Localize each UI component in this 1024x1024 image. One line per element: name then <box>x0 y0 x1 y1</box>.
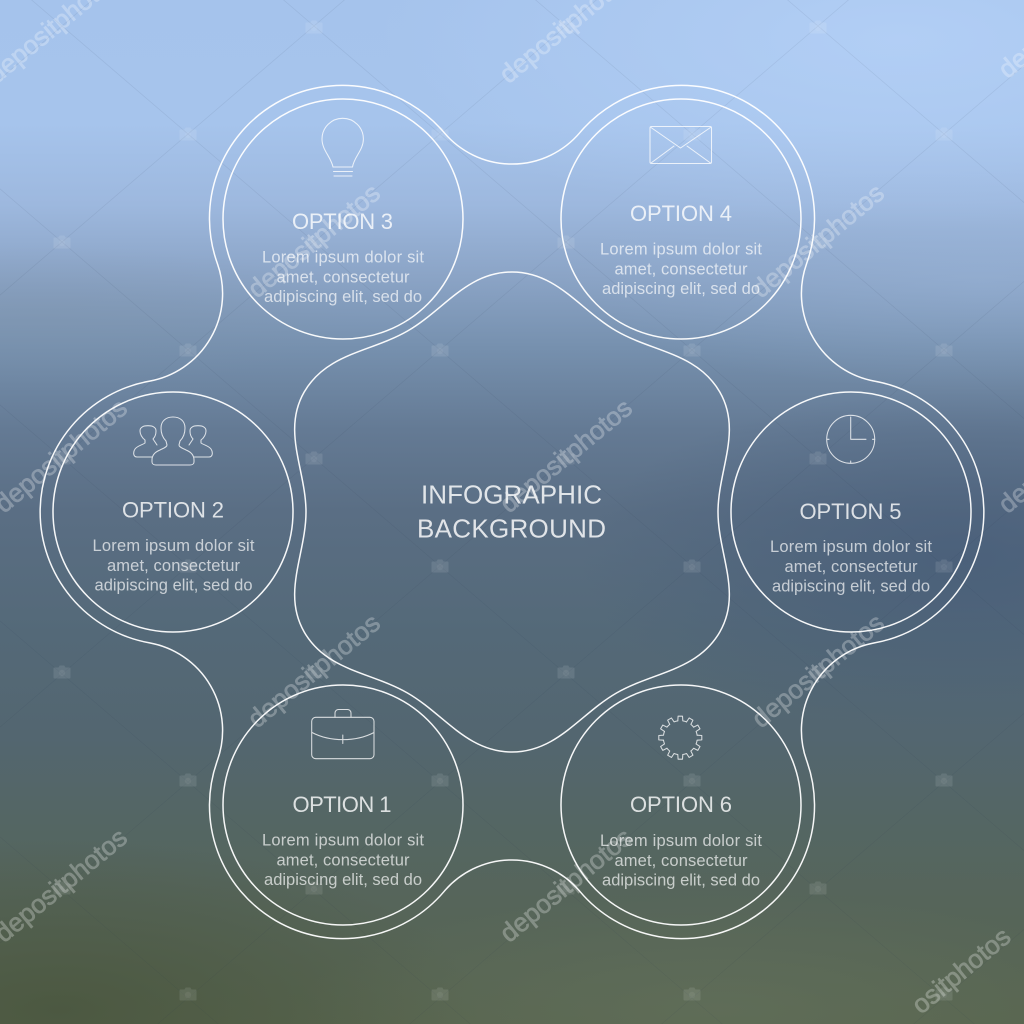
description <box>262 248 424 306</box>
description: amet, consectetur <box>784 558 918 576</box>
description <box>600 832 762 890</box>
description: Lorem ipsum dolor sit <box>262 248 424 266</box>
heading: OPTION 6 <box>630 792 732 817</box>
panel: option 4 <box>561 99 801 339</box>
description: adipiscing elit, sed do <box>264 288 422 306</box>
description: amet, consectetur <box>276 852 410 870</box>
description: Lorem ipsum dolor sit <box>92 537 255 555</box>
description: Lorem ipsum dolor sit <box>600 240 762 258</box>
heading: OPTION 4 <box>630 201 732 226</box>
description: amet, consectetur <box>107 557 240 575</box>
description: adipiscing elit, sed do <box>264 871 422 889</box>
watermark text: depositphotos <box>494 392 638 519</box>
icon: people <box>134 417 212 465</box>
description: Lorem ipsum dolor sit <box>600 832 762 850</box>
center title <box>417 480 606 544</box>
icon: briefcase <box>312 710 374 759</box>
icon: envelope <box>650 126 712 164</box>
description <box>600 240 762 298</box>
heading: OPTION 3 <box>292 209 393 234</box>
center title: BACKGROUND <box>417 514 606 544</box>
watermark text: depositphotos <box>494 822 638 948</box>
description <box>92 537 255 594</box>
heading: OPTION 5 <box>800 499 902 524</box>
panel: option 3 <box>223 99 463 339</box>
panel: option 1 <box>223 685 463 925</box>
outer ring outline <box>40 85 984 939</box>
center title: INFOGRAPHIC <box>421 480 602 510</box>
description: Lorem ipsum dolor sit <box>262 832 424 850</box>
description: Lorem ipsum dolor sit <box>770 538 932 556</box>
description: adipiscing elit, sed do <box>94 576 252 594</box>
description: adipiscing elit, sed do <box>602 280 760 298</box>
heading: OPTION 2 <box>122 498 224 522</box>
description <box>262 832 424 889</box>
panel: option 2 <box>53 392 293 632</box>
watermark text: depositphotos <box>746 177 890 304</box>
watermark text: depositphotos <box>242 607 386 734</box>
panel: option 6 <box>561 685 801 925</box>
description: amet, consectetur <box>614 260 748 278</box>
description: adipiscing elit, sed do <box>602 872 760 890</box>
watermark text: depositphotos <box>242 177 386 304</box>
description: amet, consectetur <box>276 268 410 286</box>
heading: OPTION 1 <box>292 792 392 817</box>
icon: gear <box>659 716 702 759</box>
description: adipiscing elit, sed do <box>772 578 930 596</box>
description <box>770 538 932 596</box>
inner central outline <box>295 272 729 752</box>
description: amet, consectetur <box>614 852 748 870</box>
icon: light bulb <box>322 118 363 176</box>
icon: clock <box>827 415 875 463</box>
panel: option 5 <box>731 392 971 632</box>
watermark text: depositphotos <box>746 607 890 734</box>
watermark text: ositphotos <box>906 921 1016 1020</box>
